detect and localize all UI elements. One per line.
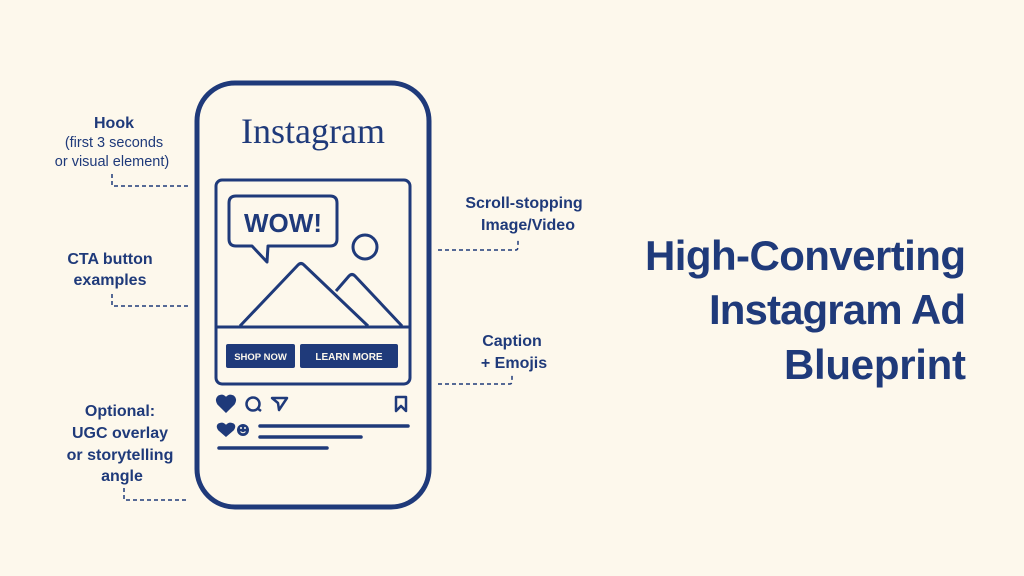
- CTA buttons: LEARN MORE: [315, 352, 383, 363]
- label: optional: angle: [101, 468, 143, 485]
- phone: [197, 83, 429, 507]
- title: Instagram Ad: [709, 286, 966, 333]
- label: scroll-stopping: Image/Video: [481, 217, 575, 234]
- label: scroll-stopping: [438, 195, 583, 250]
- label: hook: [55, 115, 188, 186]
- action icons: [217, 395, 406, 412]
- sun: [353, 235, 377, 259]
- label: caption: [438, 333, 547, 384]
- CTA buttons: SHOP NOW: [234, 352, 287, 363]
- label: caption: + Emojis: [481, 355, 547, 372]
- label: CTA: [67, 251, 188, 306]
- label: optional: Optional:: [85, 403, 155, 420]
- label: optional: UGC overlay: [72, 425, 168, 442]
- speech bubble: [229, 196, 337, 262]
- label: optional: [67, 403, 188, 500]
- label: hook: Hook: [94, 115, 134, 132]
- label: hook: (first 3 seconds: [65, 135, 163, 151]
- title: High-Converting: [645, 232, 966, 279]
- title: [645, 232, 966, 388]
- label: CTA: examples: [74, 272, 147, 289]
- label: scroll-stopping: Scroll-stopping: [465, 195, 583, 212]
- label: CTA: CTA button: [67, 251, 153, 268]
- title: Blueprint: [784, 341, 966, 388]
- label: optional: or storytelling: [67, 447, 173, 464]
- mountains: [240, 264, 402, 326]
- instagram logo text: Instagram: [241, 111, 385, 151]
- speech bubble: WOW!: [244, 208, 322, 238]
- CTA buttons: [226, 344, 398, 368]
- post frame: [216, 180, 410, 384]
- caption row: [218, 423, 408, 448]
- label: hook: or visual element): [55, 154, 169, 170]
- label: caption: Caption: [482, 333, 542, 350]
